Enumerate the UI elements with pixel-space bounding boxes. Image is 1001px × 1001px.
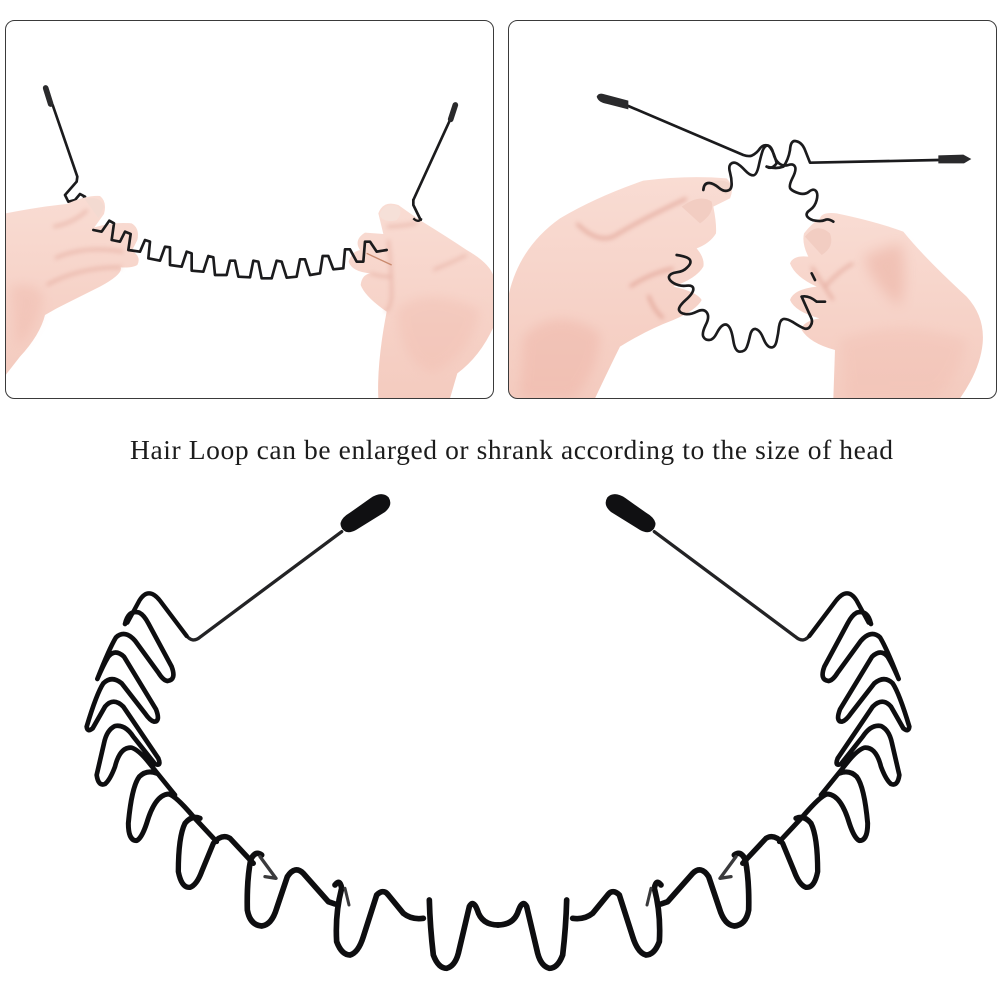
panel: band curled into small loop between two hands <box>508 20 996 398</box>
right hand <box>790 213 983 398</box>
wire stretched <box>53 105 450 220</box>
wave section of wire <box>93 221 387 278</box>
left hand <box>6 196 139 375</box>
main product: wavy black metal headband <box>87 494 909 968</box>
left hand <box>509 177 732 398</box>
caption text: Hair Loop can be enlarged or shrank according to the size of head <box>130 434 893 465</box>
left half of headband <box>87 494 498 968</box>
right hand <box>349 204 494 398</box>
panel: band stretched open between two hands <box>6 20 494 398</box>
right half of headband <box>498 494 909 968</box>
looped wire <box>628 106 938 352</box>
